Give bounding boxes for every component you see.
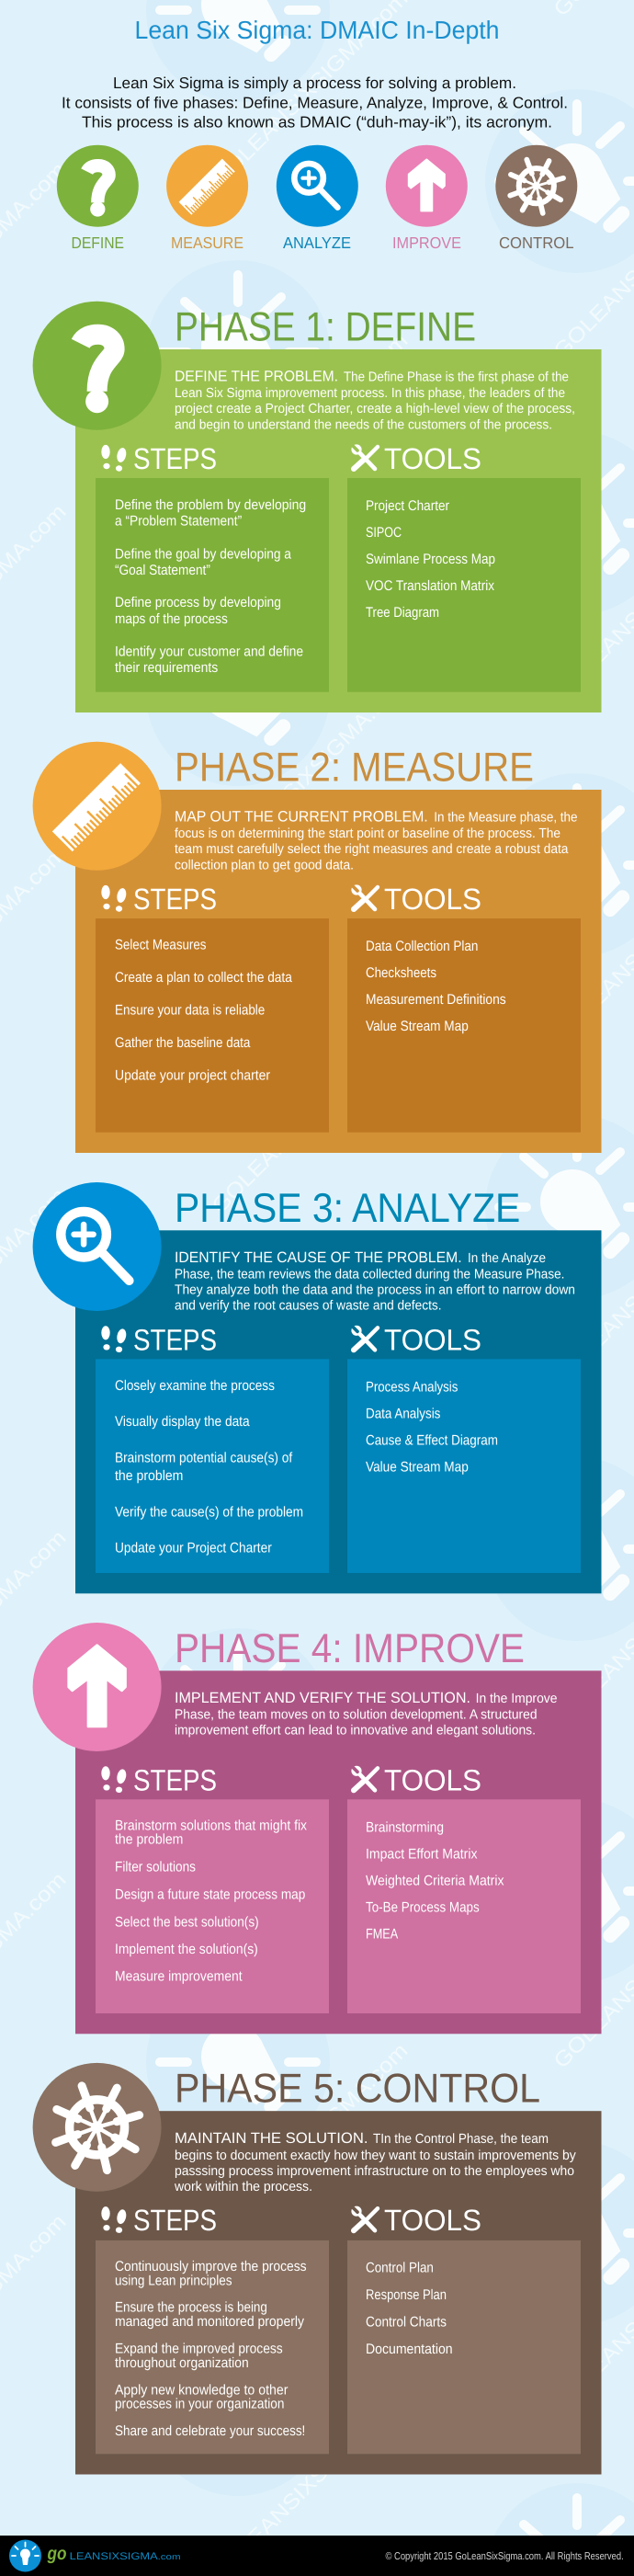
steps box: Create a plan to collect the data — [115, 970, 292, 986]
icon: improve: IMPROVE — [392, 234, 461, 252]
steps box: Gather the baseline data — [115, 1035, 251, 1051]
steps box — [96, 1799, 329, 2013]
phase 4 description: improvement effort can lead to innovative and elegant solutions. — [175, 1723, 536, 1738]
tools box: Control Plan — [366, 2260, 434, 2275]
steps box: Update your project charter — [115, 1067, 270, 1083]
phase 5 description: work within the process. — [174, 2180, 312, 2194]
panel: phase 5 control — [33, 2063, 602, 2475]
steps box: Identify your customer and define — [115, 644, 303, 660]
tools box: Control Charts — [366, 2315, 447, 2331]
intro text block: This process is also known as DMAIC (“duh-may-ik”), its acronym. — [82, 113, 552, 131]
steps heading: STEPS — [133, 2204, 217, 2237]
phase 5 heading: PHASE 5: CONTROL — [175, 2067, 540, 2112]
text: GOLEANSIXSIGMA.com — [207, 1012, 413, 1218]
phase 3 description: Phase, the team reviews the data collected during the Measure Phase. — [175, 1267, 564, 1282]
icon: logo bulb — [9, 2539, 41, 2572]
phase 2 description: focus is on determining the start point or baseline of the process. The — [175, 826, 560, 841]
text: GOLEANSIXSIGMA.com — [207, 0, 413, 192]
logo wordmark: go — [47, 2544, 66, 2564]
steps box: Expand the improved process — [115, 2341, 283, 2356]
tools box — [347, 1359, 581, 1573]
steps box: managed and monitored properly — [115, 2314, 304, 2330]
panel: phase 3 analyze — [33, 1182, 602, 1593]
steps heading: STEPS — [133, 1763, 217, 1796]
phase 3 description: and verify the root causes of waste and defects. — [175, 1299, 442, 1314]
tools box: Weighted Criteria Matrix — [366, 1874, 504, 1889]
phase 2 description — [175, 809, 577, 872]
steps box: the problem — [115, 1832, 183, 1848]
steps box — [96, 2240, 329, 2454]
phase 2 description: MAP OUT THE CURRENT PROBLEM. — [175, 809, 428, 826]
steps box — [96, 1359, 329, 1573]
phase 5 description: passsing process improvement infrastructure on to the employees who — [175, 2164, 574, 2179]
phase overview icons — [57, 145, 577, 252]
icon: control: CONTROL — [499, 234, 574, 252]
steps box: Define process by developing — [115, 595, 281, 610]
tools box: Impact Effort Matrix — [366, 1847, 478, 1863]
steps box: Brainstorm solutions that might fix — [115, 1818, 307, 1834]
steps box — [96, 918, 329, 1133]
steps box: using Lean principles — [115, 2273, 232, 2288]
steps box: Filter solutions — [115, 1860, 196, 1875]
phase 2 description: collection plan to get good data. — [175, 858, 354, 872]
phase 3 description: They analyze both the data and the process in an effort to narrow down — [175, 1282, 575, 1297]
tools box: Data Analysis — [366, 1406, 441, 1421]
tools box: Response Plan — [366, 2287, 447, 2303]
tools box: Process Analysis — [366, 1379, 459, 1395]
intro text block: It consists of five phases: Define, Measure, Analyze, Improve, & Control. — [62, 94, 568, 112]
phase 3 description: IDENTIFY THE CAUSE OF THE PROBLEM. — [175, 1249, 462, 1266]
steps heading — [101, 1763, 217, 1796]
steps box: Closely examine the process — [115, 1378, 275, 1394]
phase 4 icon — [33, 1623, 162, 1751]
phase 5 description: MAINTAIN THE SOLUTION. — [175, 2130, 368, 2147]
tools heading: TOOLS — [384, 1763, 481, 1796]
tools box: SIPOC — [366, 525, 402, 541]
icon: analyze — [277, 145, 358, 252]
tools box: Cause & Effect Diagram — [366, 1432, 498, 1448]
text: GOLEANSIXSIGMA.com — [207, 1354, 413, 1560]
steps box: Define the problem by developing — [115, 497, 306, 513]
phase 4 description: In the Improve — [476, 1692, 557, 1706]
steps heading: STEPS — [133, 442, 217, 475]
steps box: Design a future state process map — [115, 1887, 305, 1903]
steps box: Continuously improve the process — [115, 2259, 307, 2274]
phase 1 heading: PHASE 1: DEFINE — [175, 305, 476, 350]
icon: define: DEFINE — [72, 234, 124, 252]
steps heading: STEPS — [133, 883, 217, 916]
logo wordmark: .com — [158, 2552, 181, 2561]
tools box: Swimlane Process Map — [366, 552, 495, 567]
panel: phase 1 define — [33, 302, 602, 712]
tools heading: TOOLS — [384, 883, 481, 916]
tools box: Data Collection Plan — [366, 939, 478, 954]
logo wordmark — [47, 2544, 181, 2564]
steps heading: STEPS — [133, 1323, 217, 1356]
steps box: Ensure the process is being — [115, 2300, 267, 2316]
steps box: Update your Project Charter — [115, 1540, 272, 1556]
phase 5 description: TIn the Control Phase, the team — [373, 2132, 549, 2147]
steps box: Brainstorm potential cause(s) of — [115, 1450, 293, 1465]
tools box — [347, 478, 581, 692]
phase 3 heading: PHASE 3: ANALYZE — [175, 1186, 520, 1231]
panel: phase 4 improve — [33, 1623, 602, 2034]
phase 2 description: team must carefully select the right measures and create a robust data — [175, 842, 569, 857]
phase 5 description — [174, 2130, 576, 2194]
phase 5 description: begins to document exactly how they want to sustain improvements by — [175, 2149, 576, 2163]
icon: measure — [166, 145, 248, 252]
icon: analyze: ANALYZE — [283, 234, 351, 252]
intro text block: Lean Six Sigma is simply a process for solving a problem. — [113, 74, 516, 92]
tools box: Measurement Definitions — [366, 992, 506, 1008]
phase 1 description: Lean Six Sigma improvement process. In this phase, the leaders of the — [175, 386, 565, 401]
tools box: Documentation — [366, 2342, 453, 2357]
steps box: Share and celebrate your success! — [115, 2423, 305, 2439]
phase 3 description — [175, 1249, 575, 1314]
phase 1 description: project create a Project Charter, create a high-level view of the process, — [175, 402, 575, 416]
steps heading — [101, 1323, 217, 1356]
steps heading — [101, 442, 217, 475]
steps heading — [101, 883, 217, 916]
phase 5 icon — [33, 2063, 162, 2192]
text: GOLEANSIXSIGMA.com — [207, 2038, 413, 2244]
tools heading: TOOLS — [384, 2204, 481, 2237]
phase 1 description: and begin to understand the needs of the customers of the process. — [175, 417, 552, 432]
phase 1 description — [175, 369, 575, 432]
phase 3 description: In the Analyze — [468, 1251, 546, 1266]
tools box: Checksheets — [366, 965, 436, 981]
steps box: processes in your organization — [115, 2396, 284, 2411]
icon: improve — [386, 145, 468, 252]
icon: control — [495, 145, 577, 252]
text: GOLEANSIXSIGMA.com — [207, 670, 413, 876]
steps box: Implement the solution(s) — [115, 1942, 258, 1957]
phase 4 description — [175, 1690, 557, 1738]
title: Lean Six Sigma: DMAIC In-Depth — [134, 16, 500, 44]
tools heading: TOOLS — [384, 1323, 481, 1356]
tools box — [347, 918, 581, 1133]
steps box — [96, 478, 329, 692]
steps box: Select the best solution(s) — [115, 1914, 259, 1930]
intro text block — [62, 74, 568, 131]
tools box: Project Charter — [366, 498, 449, 514]
tools box: Value Stream Map — [366, 1459, 469, 1475]
tools box: Tree Diagram — [366, 605, 439, 621]
steps box: Ensure your data is reliable — [115, 1003, 265, 1019]
phase 2 description: In the Measure phase, the — [434, 811, 577, 826]
steps box: their requirements — [115, 660, 218, 676]
icon: define — [57, 145, 139, 252]
tools box: Value Stream Map — [366, 1019, 469, 1034]
steps box: Visually display the data — [115, 1414, 250, 1430]
tools heading: TOOLS — [384, 442, 481, 475]
tools box: To-Be Process Maps — [366, 1900, 480, 1916]
tools box: FMEA — [366, 1927, 399, 1943]
steps box: Verify the cause(s) of the problem — [115, 1504, 303, 1520]
tools box: VOC Translation Matrix — [366, 578, 494, 594]
phase 4 heading: PHASE 4: IMPROVE — [175, 1626, 525, 1671]
text: GOLEANSIXSIGMA.com — [207, 328, 413, 534]
steps box: “Goal Statement” — [115, 563, 210, 578]
phase 4 description: IMPLEMENT AND VERIFY THE SOLUTION. — [175, 1690, 470, 1706]
steps box: Select Measures — [115, 938, 207, 953]
steps box: maps of the process — [115, 611, 228, 627]
steps heading — [101, 2204, 217, 2237]
phase 1 description: The Define Phase is the first phase of the — [344, 370, 569, 385]
text: GOLEANSIXSIGMA.com — [207, 1696, 413, 1902]
phase 3 icon — [33, 1182, 162, 1311]
tools box: Brainstorming — [366, 1820, 444, 1836]
tools box — [347, 1799, 581, 2013]
phase 1 description: DEFINE THE PROBLEM. — [175, 369, 338, 385]
panel: phase 2 measure — [33, 742, 602, 1153]
phase 4 description: Phase, the team moves on to solution development. A structured — [175, 1707, 537, 1722]
phase 2 heading: PHASE 2: MEASURE — [175, 746, 534, 791]
steps box: Define the goal by developing a — [115, 546, 291, 562]
steps box: a “Problem Statement” — [115, 514, 242, 530]
steps box: the problem — [115, 1468, 183, 1484]
footer bar — [0, 2536, 634, 2576]
icon: measure: MEASURE — [171, 234, 243, 252]
logo wordmark: LEANSIXSIGMA — [70, 2551, 158, 2562]
steps box: throughout organization — [115, 2355, 249, 2371]
phase 1 icon — [33, 302, 162, 430]
steps box: Apply new knowledge to other — [115, 2382, 288, 2398]
tools box — [347, 2240, 581, 2454]
steps box: Measure improvement — [115, 1969, 243, 1985]
phase 2 icon — [33, 742, 162, 871]
